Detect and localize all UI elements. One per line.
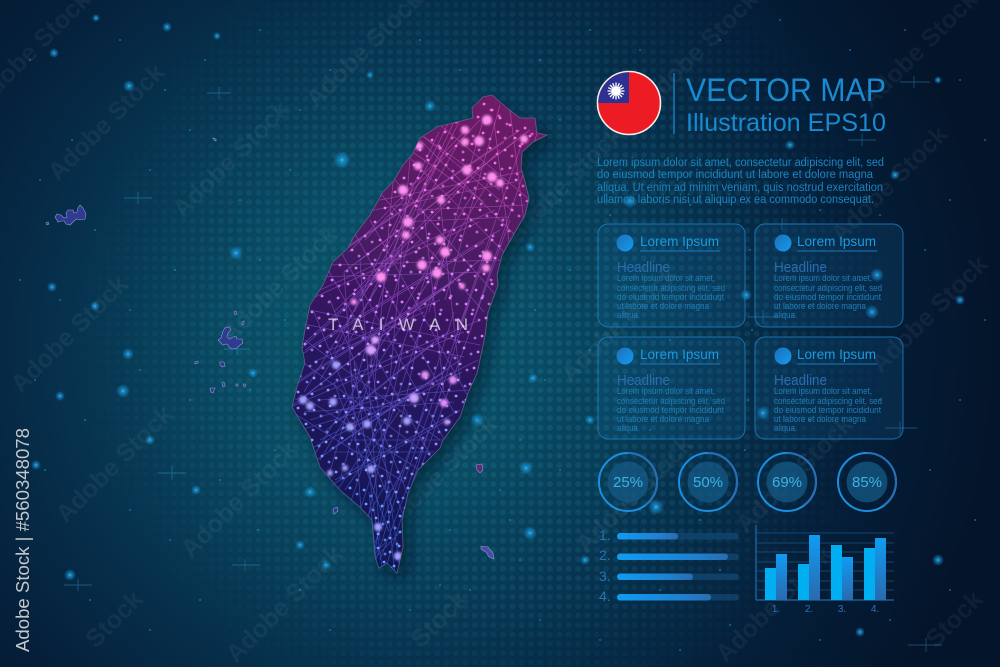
bar chart [756,525,894,615]
panel: card 1: Lorem Ipsum [640,234,719,249]
light points [298,104,537,572]
watermarks: Adobe Stock [175,435,303,563]
panel: card 1: do eiusmod tempor incididunt [617,292,724,302]
panel: card 1 [598,224,745,327]
gauge: 50% [679,453,737,511]
panel: card 2: consectetur adipiscing elit, sed [774,283,882,293]
watermarks: Adobe Stock [50,400,178,528]
gauge: 85%: 85% [852,474,882,491]
panel: card 4: aliqua. [774,423,797,433]
bar chart: 2. [805,604,813,615]
watermarks: Adobe Stock [730,410,858,538]
network lines [279,100,540,587]
gauge: 69%: 69% [772,474,802,491]
panel: card 1: Headline [617,259,670,276]
intro text block [597,157,884,206]
intro text block: ullamco laboris nisi ut aliquip ex ea commodo consequat. [597,194,874,206]
icon: Taiwan flag [598,72,660,134]
watermarks: Adobe Stock [865,250,993,378]
panel: card 4 [755,337,903,439]
intro text block: do eiusmod tempor incididunt ut labore et dolore magna [597,169,874,181]
progress bars: 1. [599,527,611,543]
panel: card 3: aliqua. [617,423,640,433]
watermarks: Stock [405,585,473,653]
offshore islands [46,138,494,559]
panel: card 1: ut labore et dolore magna [617,301,709,311]
watermarks: Adobe Stock [5,270,133,398]
progress bars: 4. [599,588,611,604]
map: Taiwan [46,95,547,587]
title [674,72,886,137]
progress bars [599,527,739,604]
panel: card 2: Headline [774,259,827,276]
watermarks: Adobe Stock [570,430,698,558]
gauge: 25% [599,453,657,511]
intro text block: Lorem ipsum dolor sit amet, consectetur adipiscing elit, sed [597,157,884,169]
main island [292,95,547,573]
panel: card 3: ut labore et dolore magna [617,414,709,424]
panel: card 1: Lorem ipsum dolor sit amet, [617,273,715,283]
gauge: 25%: 25% [613,474,643,491]
panel: card 2 [755,224,903,327]
progress bars: 2. [599,547,611,563]
panel: card 3: Lorem Ipsum [640,347,719,362]
map label: TAIWAN: TAIWAN [328,315,468,334]
bar chart: 4. [871,604,879,615]
watermarks: Adobe Stock [375,410,503,538]
panel: card 4: consectetur adipiscing elit, sed [774,396,882,406]
panel: card 1: consectetur adipiscing elit, sed [617,283,725,293]
panel: card 3: do eiusmod tempor incididunt [617,405,724,415]
panel: card 1: aliqua. [617,310,640,320]
panel: card 2: aliqua. [774,310,797,320]
watermarks: Adobe Stock [215,220,343,348]
gauge: 50%: 50% [693,474,723,491]
bar chart: 1. [772,604,780,615]
watermarks: Stock [80,585,148,653]
panel: card 3: Lorem ipsum dolor sit amet, [617,386,715,396]
panel: card 3 [598,337,745,439]
panel: card 2: ut labore et dolore magna [774,301,866,311]
panel: card 4: Lorem ipsum dolor sit amet, [774,386,872,396]
watermarks: Adobe Stock [167,95,295,223]
title: VECTOR MAP [686,72,886,108]
panel: card 4: ut labore et dolore magna [774,414,866,424]
title: Illustration EPS10 [686,109,886,137]
gauge: 69% [758,453,816,511]
watermarks: Stock [920,585,988,653]
watermarks: Adobe Stock [555,260,683,388]
watermarks: Adobe Stock [500,120,628,248]
intro text block: aliqua. Ut enim ad minim veniam, quis nostrud exercitation [597,182,883,194]
watermarks: Adobe Stock [710,540,838,667]
panel: card 4: Headline [774,372,827,389]
panel: card 2: do eiusmod tempor incididunt [774,292,881,302]
gauge: 85% [838,453,896,511]
panel: card 2: Lorem Ipsum [797,234,876,249]
stock id side label: Adobe Stock | #560348078 [13,428,33,652]
watermarks: Adobe Stock [220,540,348,667]
panel: card 2: Lorem ipsum dolor sit amet, [774,273,872,283]
watermarks: Adobe Stock [825,120,953,248]
progress bars: 3. [599,568,611,584]
watermarks: Adobe Stock [42,58,170,186]
panel: card 3: consectetur adipiscing elit, sed [617,396,725,406]
panel: card 4: Lorem Ipsum [797,347,876,362]
bar chart: 3. [838,604,846,615]
panel: card 3: Headline [617,372,670,389]
panel: card 4: do eiusmod tempor incididunt [774,405,881,415]
